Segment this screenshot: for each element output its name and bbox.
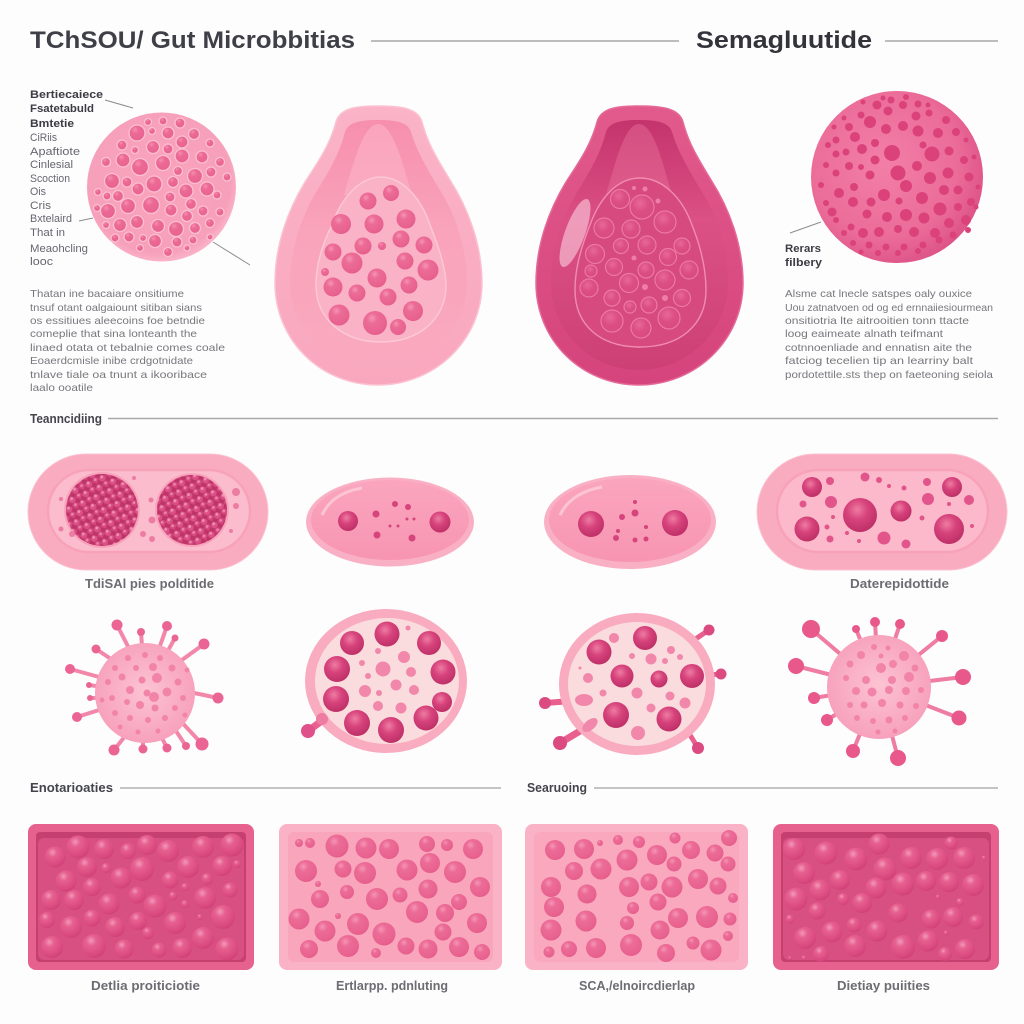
text block: left paragraph: laalo ooatile xyxy=(30,382,93,394)
label: right sphere: Rerars xyxy=(785,243,821,255)
text block: right paragraph: cotnnoenliade and ennatisn aite the xyxy=(785,342,972,354)
label: right sphere: filbery xyxy=(785,257,823,269)
label: dark tissue right: Dietiay puiities xyxy=(837,979,930,993)
text block: right paragraph xyxy=(785,288,993,381)
text block: left paragraph: Eoaerdcmisle inibe crdgotnidate xyxy=(30,355,193,367)
label list: left sphere: That in xyxy=(30,227,65,239)
icon: oval cell left xyxy=(306,478,474,566)
section heading: enotarioaties: Enotarioaties xyxy=(30,781,113,795)
callout line: right sphere xyxy=(790,222,821,233)
label list: left sphere: Scoction xyxy=(30,173,70,185)
label: light tissue left: Ertlarpp. pdnluting xyxy=(336,979,448,993)
label: dark tissue left: Detlia proiticiotie xyxy=(91,979,200,993)
label list: left sphere xyxy=(30,89,103,268)
icon: oval cell right xyxy=(544,475,716,569)
label list: left sphere: Fsatetabuld xyxy=(30,103,94,115)
icon: light pink stomach pouch xyxy=(275,106,482,385)
label list: left sphere: Ois xyxy=(30,186,46,198)
label list: left sphere: Bmtetie xyxy=(30,118,74,130)
icon: spiky microbe left xyxy=(65,620,224,756)
section heading: teanncidiing: Teanncidiing xyxy=(30,412,102,426)
text block: right paragraph: loog eaimeate alnath teifmant xyxy=(785,328,943,340)
label list: left sphere: Cris xyxy=(30,200,52,212)
text block: left paragraph: linaed otata ot tebalnie comes coale xyxy=(30,342,225,354)
text block: right paragraph: pordotettile.sts thep on faeteoning seiola xyxy=(785,369,993,381)
text block: left paragraph: tnsuf otant oalgaiount sitiban sians xyxy=(30,302,202,314)
text block: left paragraph: comeplie that sina lonteanth the xyxy=(30,328,197,340)
label: light tissue right: SCA,/elnoircdierlap xyxy=(579,979,695,993)
text block: right paragraph: fatciog tecelien tip an learriny balt xyxy=(785,355,973,367)
panel: light tissue left xyxy=(279,824,502,970)
icon: round cell left xyxy=(301,609,467,753)
text block: left paragraph: os essitiues aleecoins foe betndie xyxy=(30,315,205,327)
text block: left paragraph: Thatan ine bacaiare onsitiume xyxy=(30,288,184,300)
label: right sphere xyxy=(785,243,823,269)
icon: capsule with two clusters xyxy=(28,454,268,570)
icon: spiky microbe right xyxy=(788,617,971,766)
title: semaglutide: Semagluutide xyxy=(696,27,872,54)
icon: round cell right xyxy=(539,613,726,755)
text block: right paragraph: Alsme cat lnecle satspes oaly ouxice xyxy=(785,288,972,300)
text block: left paragraph: tnlave tiale oa tnunt a ikooribace xyxy=(30,369,207,381)
icon: dark pink stomach pouch xyxy=(536,106,743,385)
icon: right dimpled sphere xyxy=(811,91,983,263)
text block: right paragraph: onsitiotria lte aitrooitien tonn ttacte xyxy=(785,315,969,327)
label list: left sphere: Meaohcling xyxy=(30,243,88,255)
label list: left sphere: Apaftiote xyxy=(30,146,80,158)
callout lines: left sphere xyxy=(79,100,250,265)
icon: capsule with scattered granules xyxy=(757,454,1007,570)
label list: left sphere: Bxtelaird xyxy=(30,213,72,225)
text block: left paragraph xyxy=(30,288,225,394)
label list: left sphere: Bertiecaiece xyxy=(30,89,103,101)
section heading: searuoing: Searuoing xyxy=(527,781,587,795)
label list: left sphere: Cinlesial xyxy=(30,159,73,171)
panel: dark tissue right xyxy=(773,824,999,970)
text block: right paragraph: Uou zatnatvoen od og ed ernnaiiesiourmean xyxy=(785,302,993,314)
panel: light tissue right xyxy=(525,824,748,970)
label list: left sphere: CiRiis xyxy=(30,132,57,144)
label list: left sphere: looc xyxy=(30,256,54,268)
label: right capsule: Daterepidottide xyxy=(850,577,949,591)
title: gut microbiota: TChSOU/ Gut Microbbitias xyxy=(30,27,355,54)
icon: left pink microbe sphere xyxy=(87,112,236,262)
panel: dark tissue left xyxy=(28,824,254,970)
label: left capsule: TdiSAl pies polditide xyxy=(85,577,214,591)
